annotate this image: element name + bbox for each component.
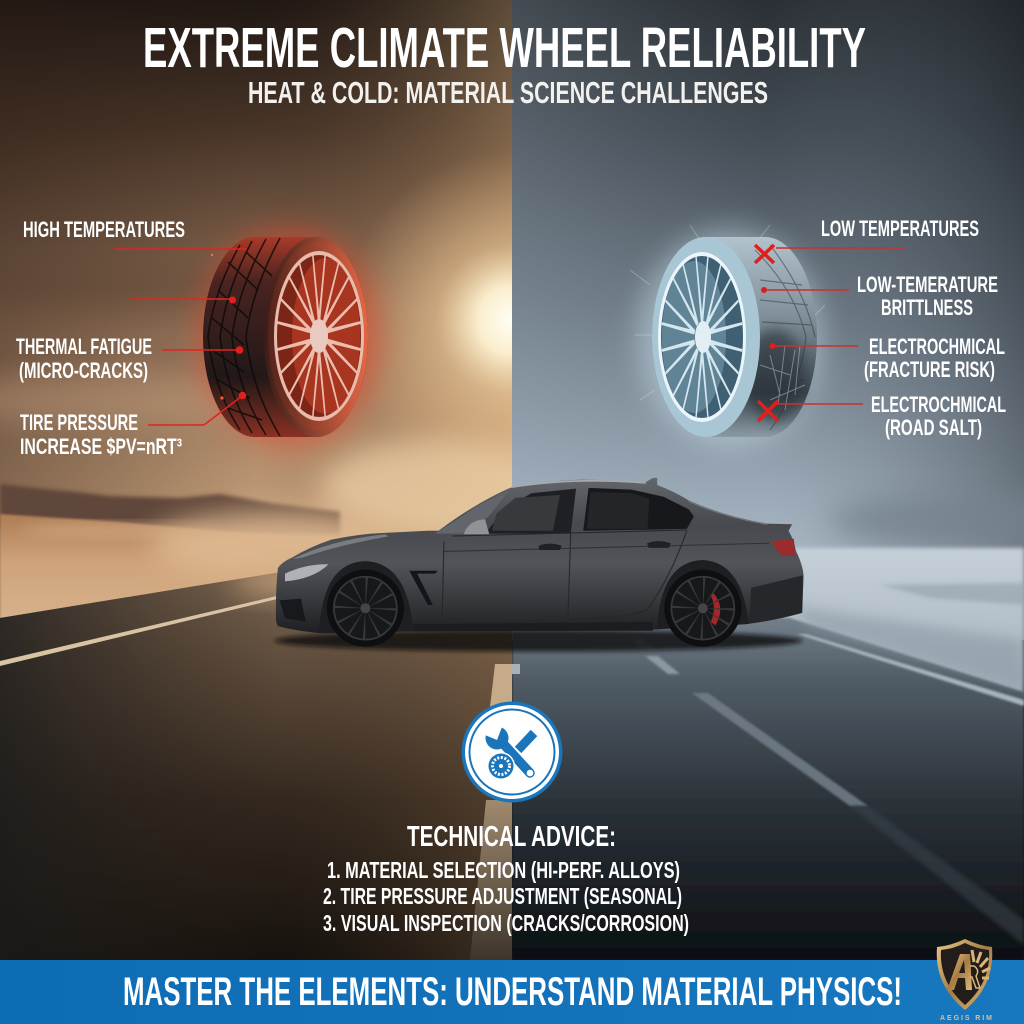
windows <box>435 488 694 534</box>
label: low-temperature brittleness <box>761 272 998 320</box>
background: frozen half <box>512 0 1024 960</box>
label: high temperatures: HIGH TEMPERATURES <box>23 217 185 242</box>
label: low temperatures <box>755 216 979 263</box>
label: tire pressure increase: TIRE PRESSURE <box>20 410 138 435</box>
logo: Aegis Rim shield: AEGIS RIM <box>940 1015 992 1022</box>
label: tire pressure increase <box>20 392 246 459</box>
advice item 2: 2. TIRE PRESSURE ADJUSTMENT (SEASONAL) <box>323 883 682 909</box>
callouts: cold <box>755 216 1006 440</box>
label: electrochemical road salt <box>758 392 1006 440</box>
advice item 1: 1. MATERIAL SELECTION (HI-PERF. ALLOYS) <box>327 857 680 883</box>
label: low-temperature brittleness: BRITTLNESS <box>881 295 973 320</box>
logo: Aegis Rim shield <box>937 939 992 1022</box>
label: thermal fatigue <box>16 334 243 383</box>
pointer: unlabelled tread marker <box>130 296 236 304</box>
label: electrochemical fracture risk <box>770 334 1005 382</box>
car <box>274 478 804 651</box>
technical advice <box>323 821 689 936</box>
label: thermal fatigue: THERMAL FATIGUE <box>16 334 152 359</box>
advice item 3: 3. VISUAL INSPECTION (CRACKS/CORROSION) <box>323 910 689 936</box>
door lines and details <box>442 530 769 620</box>
subtitle: HEAT & COLD: MATERIAL SCIENCE CHALLENGES <box>248 75 768 110</box>
heading: TECHNICAL ADVICE: <box>407 821 616 853</box>
label: thermal fatigue: (MICRO-CRACKS) <box>19 358 148 383</box>
icon: wrench, screwdriver and wheel badge <box>462 702 562 802</box>
hot tire <box>198 227 382 447</box>
label: tire pressure increase: INCREASE $PV=nRT³ <box>20 434 182 459</box>
bottom banner <box>0 960 1024 1024</box>
wheels <box>327 570 741 647</box>
cold tire <box>630 225 825 445</box>
background: hot desert half <box>0 0 512 960</box>
callouts: heat <box>16 217 247 459</box>
road markings <box>0 596 1024 960</box>
label: electrochemical road salt: (ROAD SALT) <box>885 415 982 440</box>
